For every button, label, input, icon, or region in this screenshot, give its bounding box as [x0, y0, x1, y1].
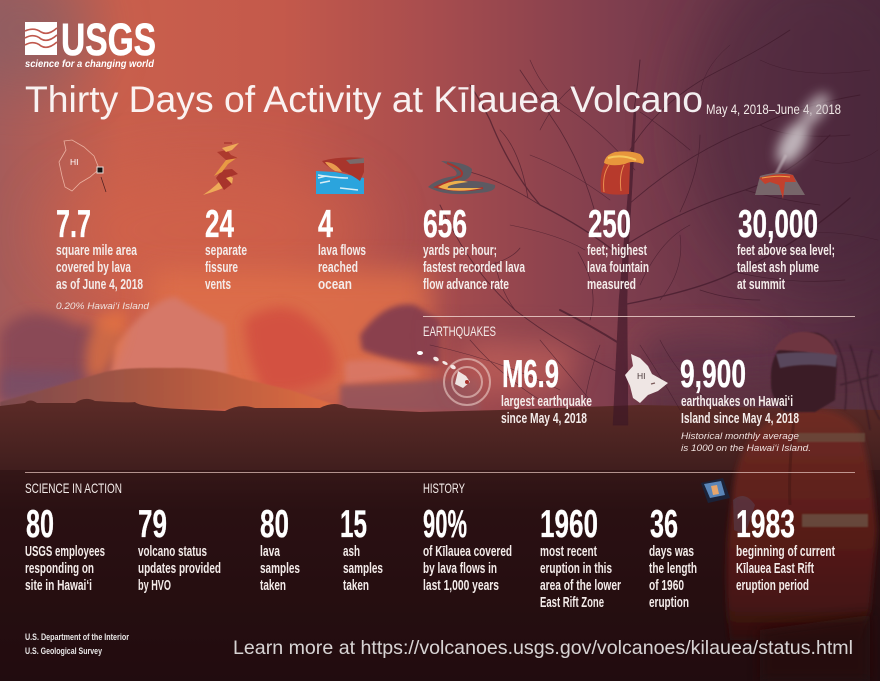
stat: status updates: volcano status	[138, 544, 207, 560]
description	[205, 243, 247, 293]
stat: status updates	[138, 503, 221, 594]
icon: lava flow channel	[428, 161, 495, 194]
stat: lava fountain	[587, 151, 649, 293]
logo: USGS	[25, 14, 156, 70]
icon: Hawaii map with lava area: HI	[70, 157, 78, 167]
note: is 1000 on the Hawai‘i Island.	[681, 443, 811, 454]
stat: lava area	[56, 140, 150, 312]
stat: lava samples	[260, 503, 300, 594]
stat: 1983 eruption: eruption period	[736, 578, 809, 594]
stat: lava samples: samples	[260, 561, 300, 577]
link: learn more: Learn more at https://volcanoes.usgs.gov/volcanoes/kilauea/status.html	[233, 637, 853, 659]
stat: employees: responding on	[25, 561, 94, 577]
note: 0.20% Hawai‘i Island	[56, 301, 150, 312]
icon: Hawaii island map: HI	[637, 371, 646, 381]
heading: earthquakes: EARTHQUAKES	[423, 323, 496, 339]
volcanic glow and clouds	[0, 270, 880, 430]
mountain silhouette	[0, 368, 345, 412]
stat: ash samples	[340, 503, 383, 594]
stat: ash samples: ash	[343, 544, 360, 560]
description	[737, 243, 835, 293]
number: 7.7	[56, 203, 91, 246]
description: lava fountain	[587, 260, 649, 276]
number: 250	[588, 203, 631, 246]
panel: science in action	[25, 480, 383, 594]
number: 4	[318, 203, 333, 246]
description: largest earthquake	[501, 394, 592, 410]
stat: status updates: updates provided	[138, 561, 221, 577]
thermal camera	[701, 478, 730, 503]
icon: USGS wave mark	[25, 22, 57, 55]
description: square mile area	[56, 243, 138, 259]
description	[56, 243, 143, 293]
stat: eruption length: days was	[649, 544, 694, 560]
stat: employees: 80	[26, 503, 54, 546]
description: since May 4, 2018	[501, 411, 587, 427]
description: fissure	[205, 260, 238, 276]
description: fastest recorded lava	[423, 260, 526, 276]
title: Thirty Days of Activity at Kīlauea Volcano	[25, 78, 703, 120]
tagline: science for a changing world	[25, 58, 155, 70]
stat: 1960 eruption: 1960	[540, 503, 598, 546]
stat: eruption length: the length	[649, 561, 697, 577]
stat: flow rate	[423, 161, 526, 293]
icon: fissure	[203, 143, 239, 195]
description: feet; highest	[587, 243, 647, 259]
panel: earthquakes	[417, 323, 811, 454]
stat: 1960 eruption: area of the lower	[540, 578, 621, 594]
stat: eruption length: 36	[650, 503, 678, 546]
description: vents	[205, 277, 231, 293]
wordmark: USGS	[61, 14, 156, 65]
description	[423, 243, 526, 293]
agency credit: U.S. Department of the Interior	[25, 632, 129, 643]
stat: 1983 eruption	[736, 503, 835, 594]
stat: status updates: by HVO	[138, 578, 171, 594]
number: 24	[205, 203, 234, 246]
stat: ash plume	[737, 89, 835, 293]
description: measured	[587, 277, 636, 293]
stat: 1983 eruption: Kīlauea East Rift	[736, 561, 814, 577]
stat: lava samples: taken	[260, 578, 286, 594]
stat: employees	[25, 503, 105, 594]
stat: ash samples: taken	[343, 578, 369, 594]
icon: lava fountain	[600, 151, 644, 195]
geologist silhouette	[726, 332, 880, 681]
icon: Hawaii island map	[625, 354, 668, 403]
stat: coverage: of Kīlauea covered	[423, 544, 512, 560]
heading: science in action: SCIENCE IN ACTION	[25, 480, 122, 496]
heading: history: HISTORY	[423, 480, 465, 496]
description	[587, 243, 649, 293]
stat: status updates: 79	[138, 503, 167, 546]
stat: eruption length: of 1960	[649, 578, 684, 594]
stat: lava samples: 80	[260, 503, 289, 546]
stat: 1960 eruption: eruption in this	[540, 561, 612, 577]
description	[501, 394, 592, 427]
stat: 1983 eruption: beginning of current	[736, 544, 835, 560]
icon: volcano with ash plume	[755, 89, 834, 199]
stat: 1983 eruption: 1983	[736, 503, 795, 546]
stat: 1960 eruption: most recent	[540, 544, 597, 560]
description: lava flows	[318, 243, 366, 259]
stat: eruption length: eruption	[649, 595, 689, 611]
description: flow advance rate	[423, 277, 509, 293]
stat: coverage: last 1,000 years	[423, 578, 499, 594]
stat: coverage: by lava flows in	[423, 561, 497, 577]
bare tree	[430, 30, 878, 425]
description: as of June 4, 2018	[56, 277, 143, 293]
agency credit: U.S. Geological Survey	[25, 646, 103, 657]
stat: lava samples: lava	[260, 544, 281, 560]
description	[681, 394, 799, 427]
icon: island chain with epicenter rings	[417, 351, 490, 405]
stat: 1960 eruption	[540, 503, 621, 611]
stat: fissure vents	[203, 143, 247, 293]
stat: eruption length	[649, 503, 697, 611]
date range: May 4, 2018–June 4, 2018	[706, 101, 841, 117]
description: Island since May 4, 2018	[681, 411, 799, 427]
description	[318, 243, 366, 293]
description: reached	[318, 260, 358, 276]
number: M6.9	[502, 353, 559, 396]
description: earthquakes on Hawai‘i	[681, 394, 793, 410]
description: covered by lava	[56, 260, 132, 276]
description: yards per hour;	[423, 243, 497, 259]
description: tallest ash plume	[737, 260, 819, 276]
stat: employees: site in Hawai‘i	[25, 578, 92, 594]
note: Historical monthly average	[681, 431, 799, 442]
stat: ash samples: samples	[343, 561, 383, 577]
panel: history	[423, 480, 835, 611]
stat: employees: USGS employees	[25, 544, 105, 560]
stat: coverage: 90%	[423, 503, 467, 546]
description: ocean	[318, 277, 352, 293]
number: 656	[423, 203, 467, 246]
stat: ash samples: 15	[340, 503, 367, 546]
note	[681, 431, 811, 454]
icon: lava entering ocean	[316, 157, 364, 194]
icon: Hawaii map with lava area	[59, 140, 106, 192]
stat: coverage	[423, 503, 512, 594]
number: 30,000	[738, 203, 818, 246]
stat: ocean flows	[316, 157, 366, 293]
agency credit	[25, 632, 129, 657]
description: feet above sea level;	[737, 243, 835, 259]
stat: 1960 eruption: East Rift Zone	[540, 595, 604, 611]
number: 9,900	[680, 353, 746, 396]
dark ground	[0, 399, 880, 681]
description: separate	[205, 243, 247, 259]
description: at summit	[737, 277, 785, 293]
